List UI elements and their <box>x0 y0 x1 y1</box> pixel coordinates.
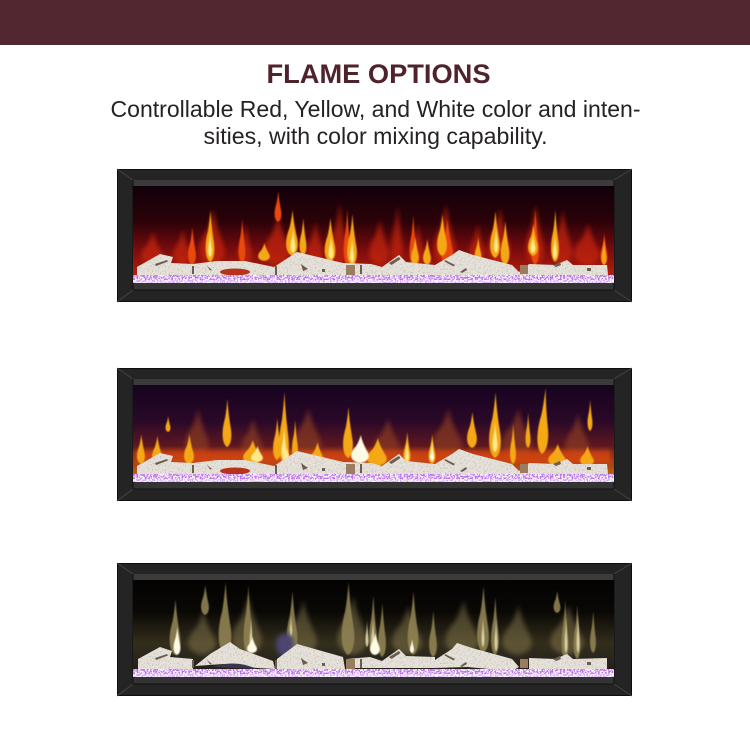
description text <box>110 96 640 149</box>
panel: white flame fireplace <box>117 563 632 696</box>
panel: yellow flame fireplace <box>117 368 632 501</box>
header bar <box>0 0 750 45</box>
description text: Controllable Red, Yellow, and White color and inten- <box>110 96 640 122</box>
panel: red flame fireplace <box>117 169 632 302</box>
title: FLAME OPTIONS <box>266 59 490 89</box>
description text: sities, with color mixing capability. <box>204 123 548 149</box>
ember glow band <box>135 450 611 464</box>
